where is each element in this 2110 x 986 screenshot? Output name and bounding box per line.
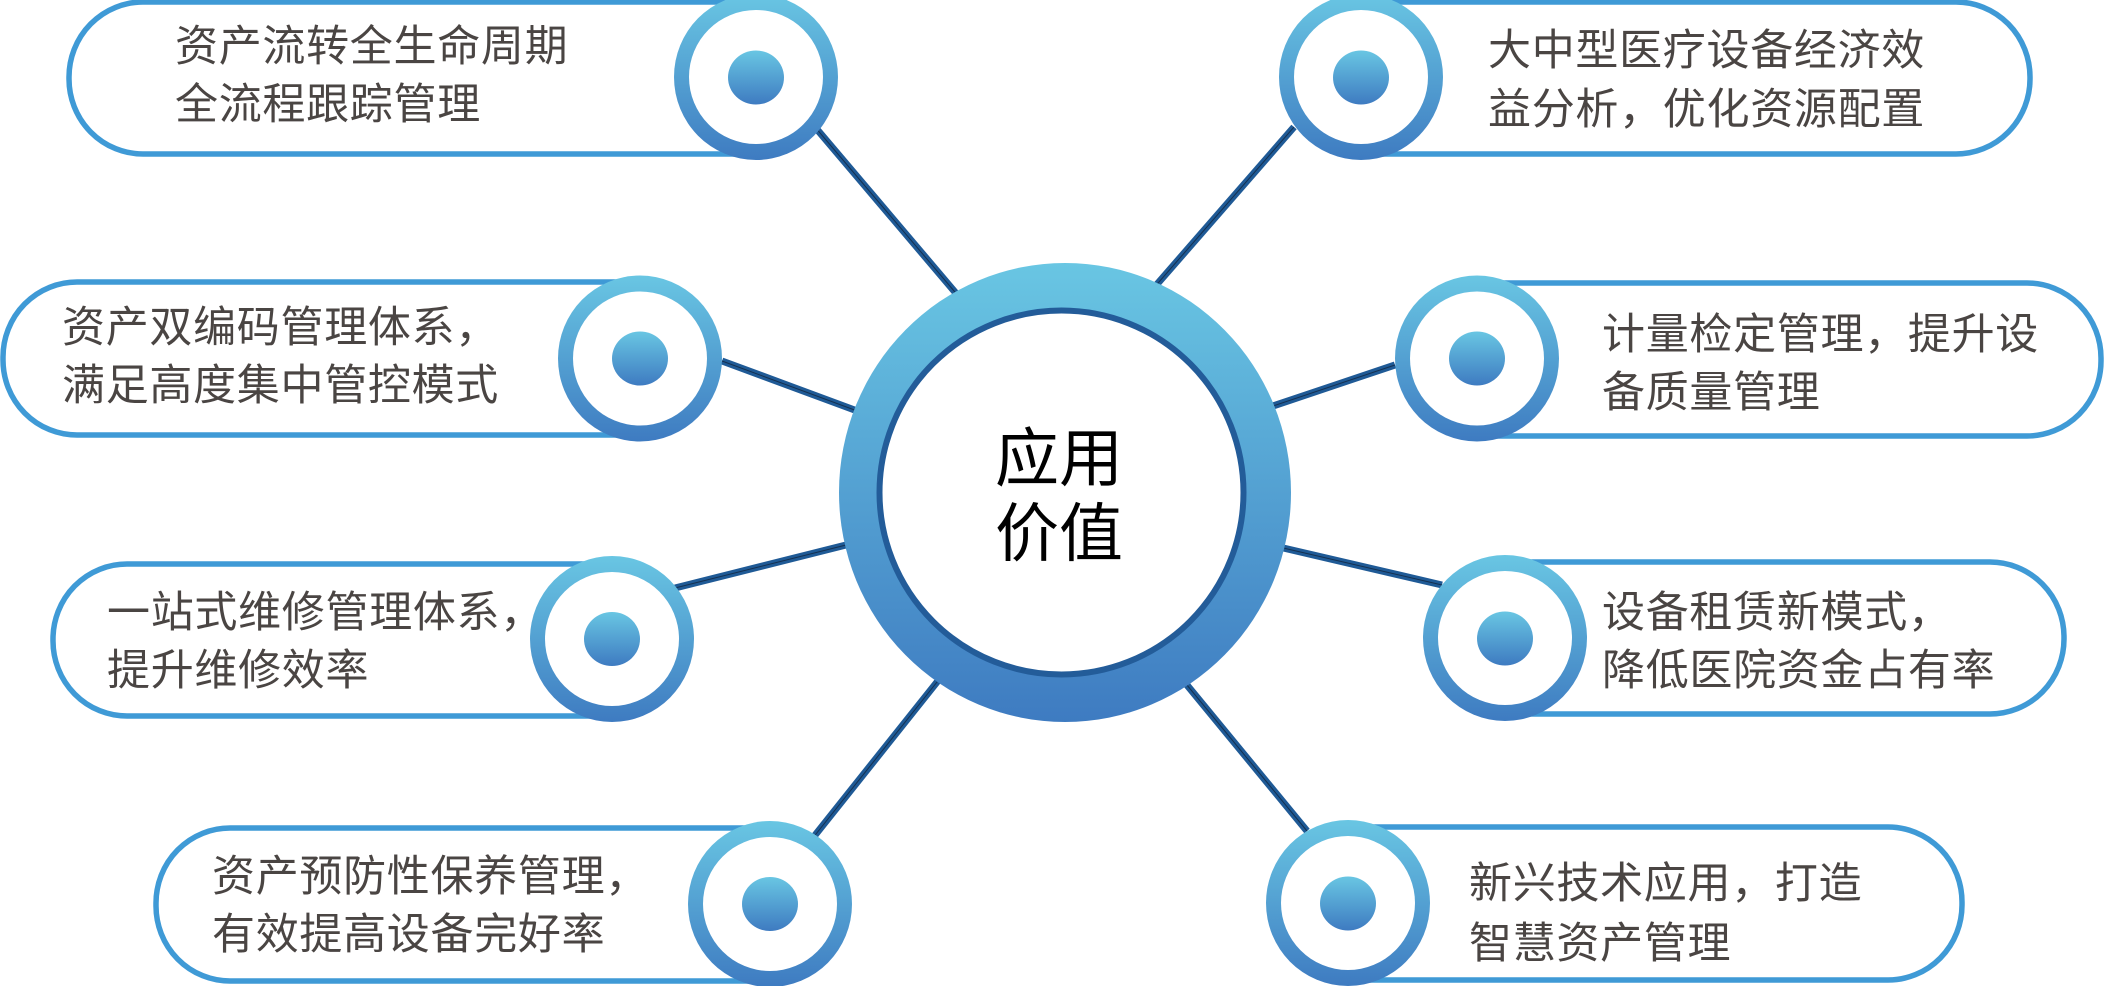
label: 大中型医疗设备经济效 <box>1488 27 1925 75</box>
label: 有效提高设备完好率 <box>212 911 605 959</box>
item: preventive maintenance <box>156 821 852 986</box>
item: equipment leasing <box>1423 555 2064 721</box>
item: economic benefit analysis <box>1279 0 2030 160</box>
label: 一站式维修管理体系， <box>107 589 544 637</box>
label: 益分析，优化资源配置 <box>1488 86 1925 134</box>
label: 降低医院资金占有率 <box>1602 647 1995 695</box>
label: 备质量管理 <box>1602 369 1820 417</box>
item: lifecycle tracking <box>69 0 838 160</box>
hub title: 价值 <box>995 498 1123 570</box>
item: one-stop repair <box>53 556 694 722</box>
label: 设备租赁新模式， <box>1602 589 1952 637</box>
item: emerging technology <box>1266 820 1962 986</box>
label: 计量检定管理，提升设 <box>1602 311 2039 359</box>
center hub <box>839 263 1291 722</box>
label: 资产预防性保养管理， <box>212 853 649 901</box>
label: 满足高度集中管控模式 <box>62 362 499 410</box>
item: dual coding <box>3 276 722 442</box>
hub title: 应用 <box>995 423 1123 495</box>
label: 资产流转全生命周期 <box>175 23 568 71</box>
label: 资产双编码管理体系， <box>62 304 499 352</box>
connector lines <box>675 127 1442 839</box>
label: 新兴技术应用，打造 <box>1469 860 1862 908</box>
item: metrology verification <box>1395 276 2101 442</box>
label: 全流程跟踪管理 <box>175 81 481 129</box>
label: 智慧资产管理 <box>1469 920 1731 968</box>
label: 提升维修效率 <box>107 647 369 695</box>
